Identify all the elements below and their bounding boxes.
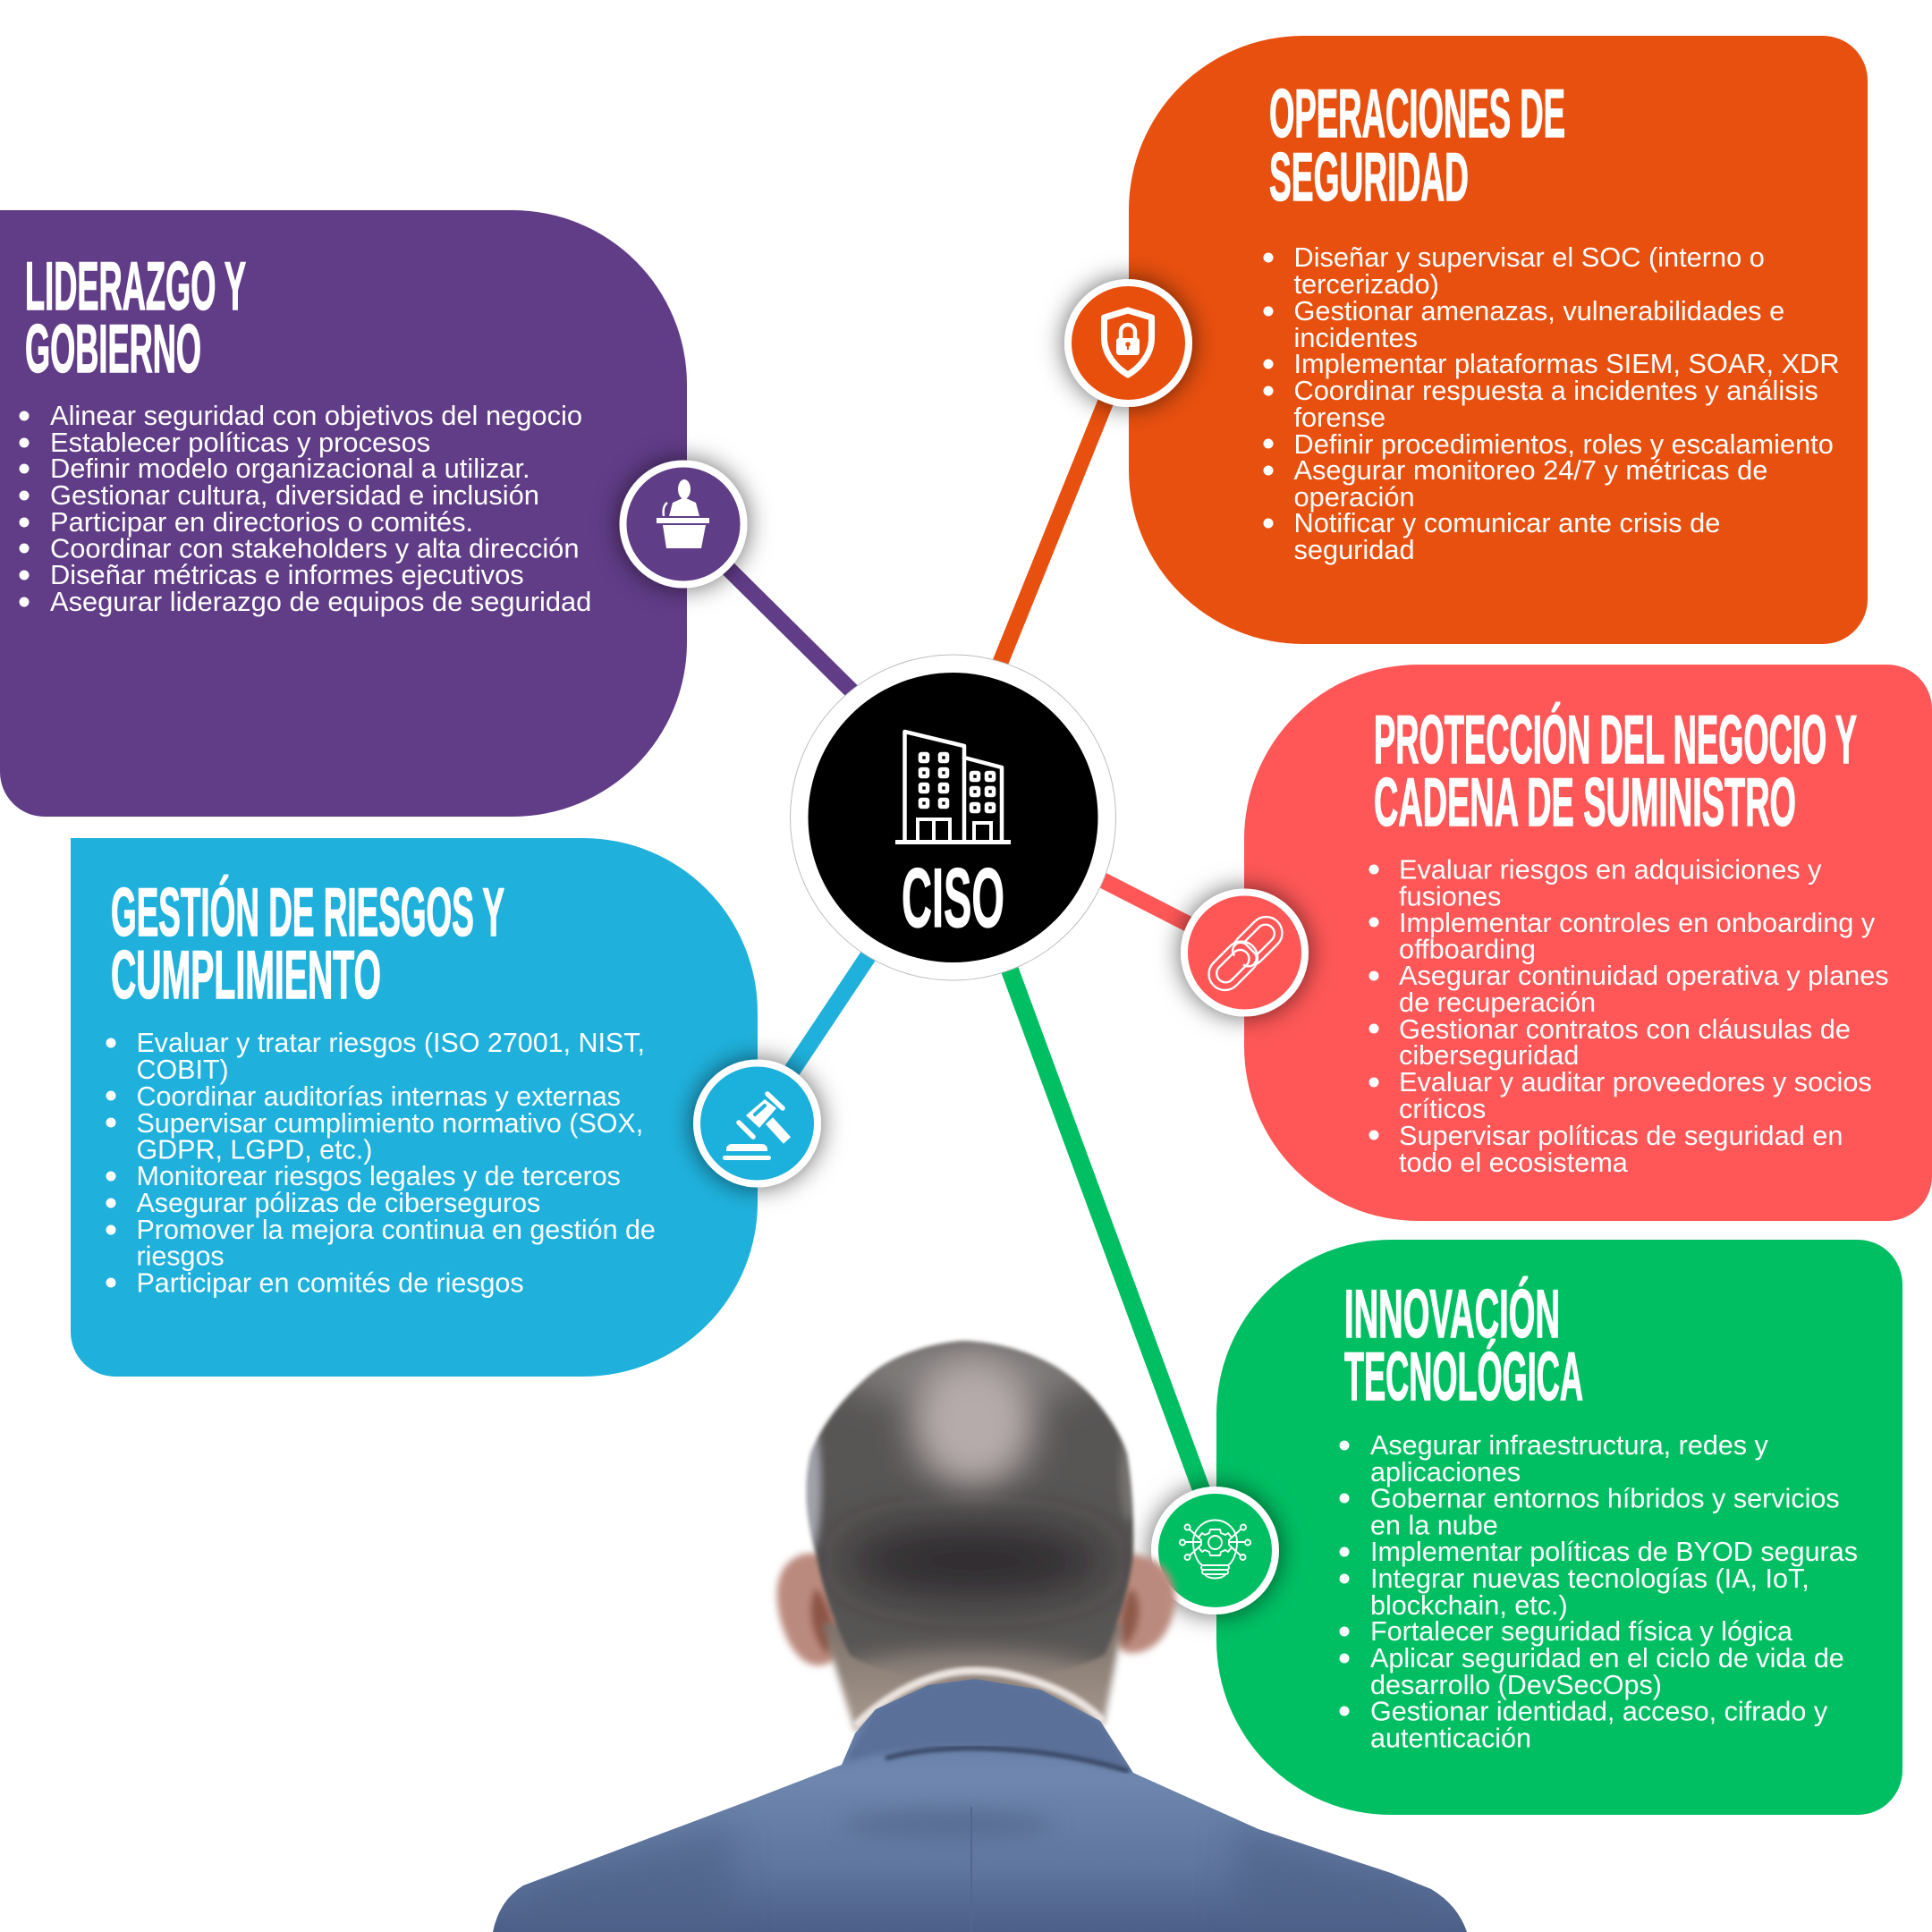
panel: innovacion tecnologica: TECNOLÓGICA <box>1344 1339 1583 1415</box>
list: operaciones: Implementar plataformas SIEM, SOAR, XDR <box>1293 348 1840 379</box>
list: operaciones: Gestionar amenazas, vulnerabilidades e <box>1293 295 1784 326</box>
heading: gestion de riesgos <box>111 875 504 1013</box>
photo: man from behind <box>483 1333 1476 1932</box>
list: proteccion: de recuperación <box>1399 987 1596 1018</box>
list: operaciones: forense <box>1293 402 1385 433</box>
hair <box>803 1338 1136 1669</box>
list: riesgos: Coordinar auditorías internas y externas <box>136 1081 621 1112</box>
list: liderazgo: Asegurar liderazgo de equipos de seguridad <box>50 586 591 617</box>
list: liderazgo: Participar en directorios o comités. <box>50 506 473 538</box>
list: liderazgo <box>20 400 591 617</box>
list: innovacion: Gestionar identidad, acceso, cifrado y <box>1370 1696 1828 1726</box>
panel: operaciones de seguridad: OPERACIONES DE <box>1269 76 1565 152</box>
panel: gestion de riesgos: GESTIÓN DE RIESGOS Y <box>111 875 504 951</box>
jacket <box>483 1673 1476 1932</box>
list: proteccion: ciberseguridad <box>1399 1039 1579 1071</box>
list: innovacion <box>1340 1430 1858 1753</box>
list: liderazgo: Diseñar métricas e informes ejecutivos <box>50 559 524 590</box>
panel: innovacion tecnologica <box>1216 1240 1902 1815</box>
list: operaciones <box>1263 242 1840 565</box>
heading: gestion de riesgos: CUMPLIMIENTO <box>111 937 381 1013</box>
shirt collar <box>855 1671 1104 1726</box>
connector: riesgos to CISO <box>757 930 886 1123</box>
icon badge: shield with lock <box>1068 283 1189 403</box>
list: innovacion: Aplicar seguridad en el ciclo de vida de <box>1370 1643 1844 1674</box>
heading: operaciones de seguridad <box>1269 76 1565 216</box>
panel: gestion de riesgos <box>71 838 758 1377</box>
list: proteccion: Evaluar riesgos en adquisiciones y <box>1399 853 1822 886</box>
list: riesgos: COBIT) <box>136 1055 229 1085</box>
list: proteccion: Supervisar políticas de seguridad en <box>1399 1120 1843 1151</box>
list: riesgos: Promover la mejora continua en gestión de <box>136 1215 656 1245</box>
heading: liderazgo y gobierno <box>25 249 246 387</box>
list: operaciones: seguridad <box>1293 534 1415 565</box>
list: liderazgo: Establecer políticas y procesos <box>50 427 430 458</box>
list: riesgos: Asegurar pólizas de ciberseguros <box>136 1188 540 1218</box>
icon badge: chain link <box>1184 893 1305 1013</box>
list: liderazgo: Coordinar con stakeholders y alta dirección <box>50 533 579 564</box>
list: proteccion: Asegurar continuidad operativa y planes <box>1399 960 1889 991</box>
list: operaciones: Definir procedimientos, roles y escalamiento <box>1293 428 1834 460</box>
heading: proteccion del negocio <box>1374 702 1857 841</box>
list: riesgos: Participar en comités de riesgos <box>136 1268 524 1299</box>
list: innovacion: Gobernar entornos híbridos y servicios <box>1370 1483 1840 1513</box>
list: liderazgo: Definir modelo organizacional a utilizar. <box>50 453 530 484</box>
connector: operaciones to CISO <box>984 343 1130 703</box>
list: riesgos: GDPR, LGPD, etc.) <box>136 1134 372 1165</box>
center hub: CISO <box>791 655 1116 980</box>
list: proteccion: Evaluar y auditar proveedores y socios <box>1399 1066 1872 1097</box>
ears <box>777 1554 1175 1665</box>
list: riesgos: Monitorear riesgos legales y de terceros <box>136 1161 621 1191</box>
list: proteccion: Gestionar contratos con cláusulas de <box>1399 1013 1851 1045</box>
list: operaciones: Asegurar monitoreo 24/7 y métricas de <box>1293 454 1767 486</box>
connector: innovacion to CISO <box>1002 948 1224 1550</box>
heading: operaciones de seguridad: SEGURIDAD <box>1269 140 1469 216</box>
list: riesgos: riesgos <box>136 1241 225 1272</box>
list: riesgos: Supervisar cumplimiento normativo (SOX, <box>136 1108 643 1139</box>
heading: innovacion tecnologica: INNOVACIÓN <box>1344 1276 1560 1352</box>
list: proteccion: offboarding <box>1399 934 1536 964</box>
list: innovacion: desarrollo (DevSecOps) <box>1370 1670 1662 1700</box>
list: operaciones: Coordinar respuesta a incidentes y análisis <box>1293 375 1818 406</box>
panel: operaciones de seguridad <box>1129 36 1868 644</box>
list: operaciones: Diseñar y supervisar el SOC (interno o <box>1293 242 1765 273</box>
list: proteccion: Implementar controles en onboarding y <box>1399 907 1876 938</box>
list: innovacion: autenticación <box>1370 1723 1531 1753</box>
heading: liderazgo y gobierno: GOBIERNO <box>25 311 201 387</box>
icon: office buildings <box>895 732 1011 843</box>
list: proteccion <box>1368 853 1889 1178</box>
connector: liderazgo to CISO <box>683 524 877 716</box>
list: innovacion: en la nube <box>1370 1510 1498 1540</box>
icon badge: podium speaker <box>623 463 744 585</box>
list: operaciones: tercerizado) <box>1293 268 1439 300</box>
list: operaciones: Notificar y comunicar ante crisis de <box>1293 507 1720 538</box>
list: riesgos: Evaluar y tratar riesgos (ISO 27001, NIST, <box>136 1028 645 1058</box>
list: operaciones: incidentes <box>1293 322 1418 353</box>
list: innovacion: aplicaciones <box>1370 1457 1521 1487</box>
panel: liderazgo y gobierno: LIDERAZGO Y <box>25 249 246 325</box>
list: operaciones: operación <box>1293 481 1415 513</box>
icon badge: light bulb with gear <box>1155 1490 1275 1611</box>
label: CISO: CISO <box>902 851 1004 945</box>
list: proteccion: críticos <box>1399 1093 1486 1124</box>
connector: proteccion to CISO <box>1055 856 1244 953</box>
list: proteccion: fusiones <box>1399 880 1501 912</box>
list: innovacion: Implementar políticas de BYOD seguras <box>1370 1537 1858 1567</box>
list: innovacion: blockchain, etc.) <box>1370 1590 1568 1621</box>
list: liderazgo: Alinear seguridad con objetivos del negocio <box>50 400 582 431</box>
panel: proteccion del negocio <box>1244 665 1932 1221</box>
heading: innovacion tecnologica <box>1344 1276 1583 1415</box>
icon badge: gavel <box>697 1063 818 1184</box>
list: liderazgo: Gestionar cultura, diversidad e inclusión <box>50 479 539 511</box>
neck <box>822 1623 1123 1731</box>
panel: liderazgo y gobierno <box>0 210 687 817</box>
list: proteccion: todo el ecosistema <box>1399 1147 1629 1178</box>
list: innovacion: Asegurar infraestructura, redes y <box>1370 1430 1769 1461</box>
list: innovacion: Fortalecer seguridad física y lógica <box>1370 1616 1792 1647</box>
list: innovacion: Integrar nuevas tecnologías (IA, IoT, <box>1370 1563 1809 1594</box>
list: riesgos <box>106 1028 656 1299</box>
